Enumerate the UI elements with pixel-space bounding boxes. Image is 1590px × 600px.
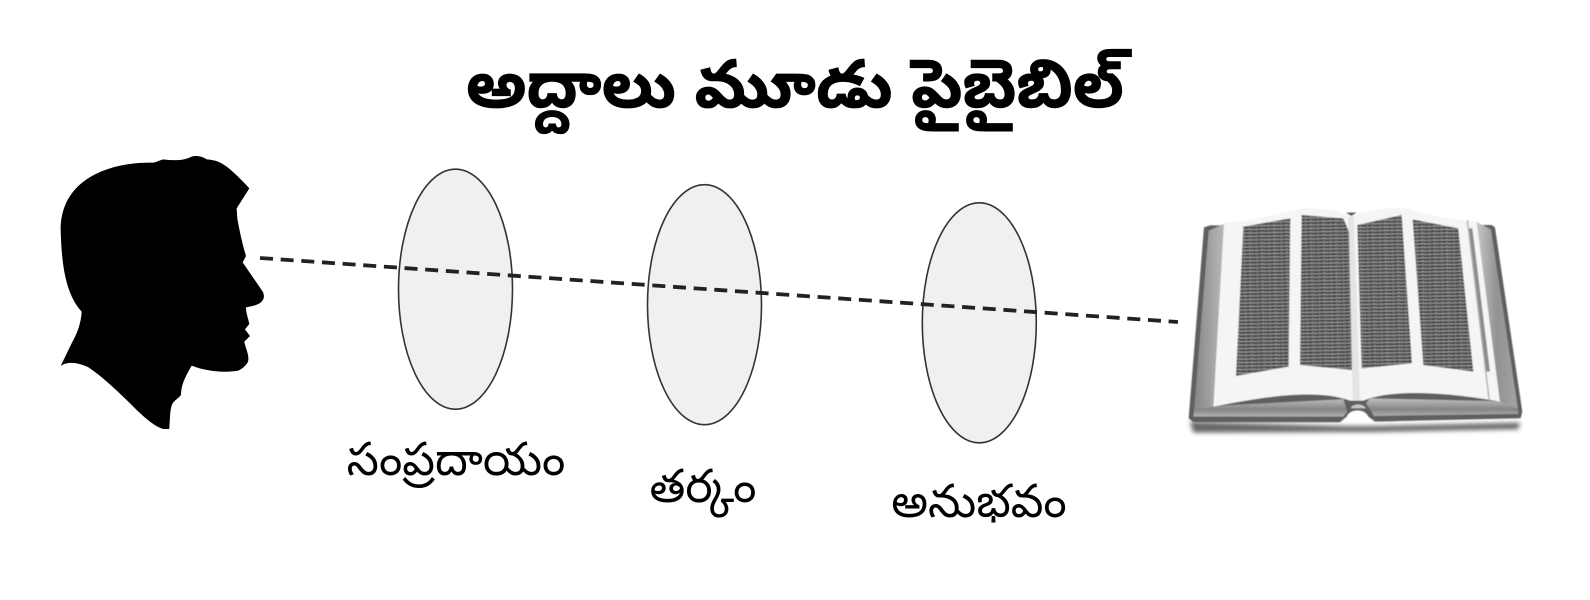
label: experience: అనుభవం xyxy=(891,475,1067,527)
page edges right xyxy=(1476,222,1518,409)
pages xyxy=(1213,208,1500,407)
text column 1 xyxy=(1236,218,1290,376)
spine notch xyxy=(1346,213,1357,216)
icon: open book xyxy=(1189,208,1522,433)
label: reason: తర్కం xyxy=(650,460,756,512)
lens: experience xyxy=(922,203,1036,443)
text column 3 xyxy=(1357,215,1412,368)
margin rule xyxy=(1467,220,1490,401)
page edges left xyxy=(1194,223,1227,411)
gutter shadow xyxy=(1348,217,1360,400)
dashed line of sight xyxy=(260,258,1178,322)
icon: head silhouette xyxy=(61,156,264,429)
lens: reason xyxy=(648,185,762,425)
text column 4 xyxy=(1413,219,1473,372)
bottom page block xyxy=(1193,398,1518,417)
side margin text xyxy=(1469,228,1490,372)
title: అద్దాలు మూడు పైబైబిల్ xyxy=(466,48,1124,122)
text column 2 xyxy=(1300,215,1352,370)
label: tradition: సంప్రదాయం xyxy=(347,433,565,485)
book shadow xyxy=(1190,422,1520,433)
lens: tradition xyxy=(398,169,512,409)
spine arch xyxy=(1351,405,1366,408)
book cover xyxy=(1189,225,1522,422)
